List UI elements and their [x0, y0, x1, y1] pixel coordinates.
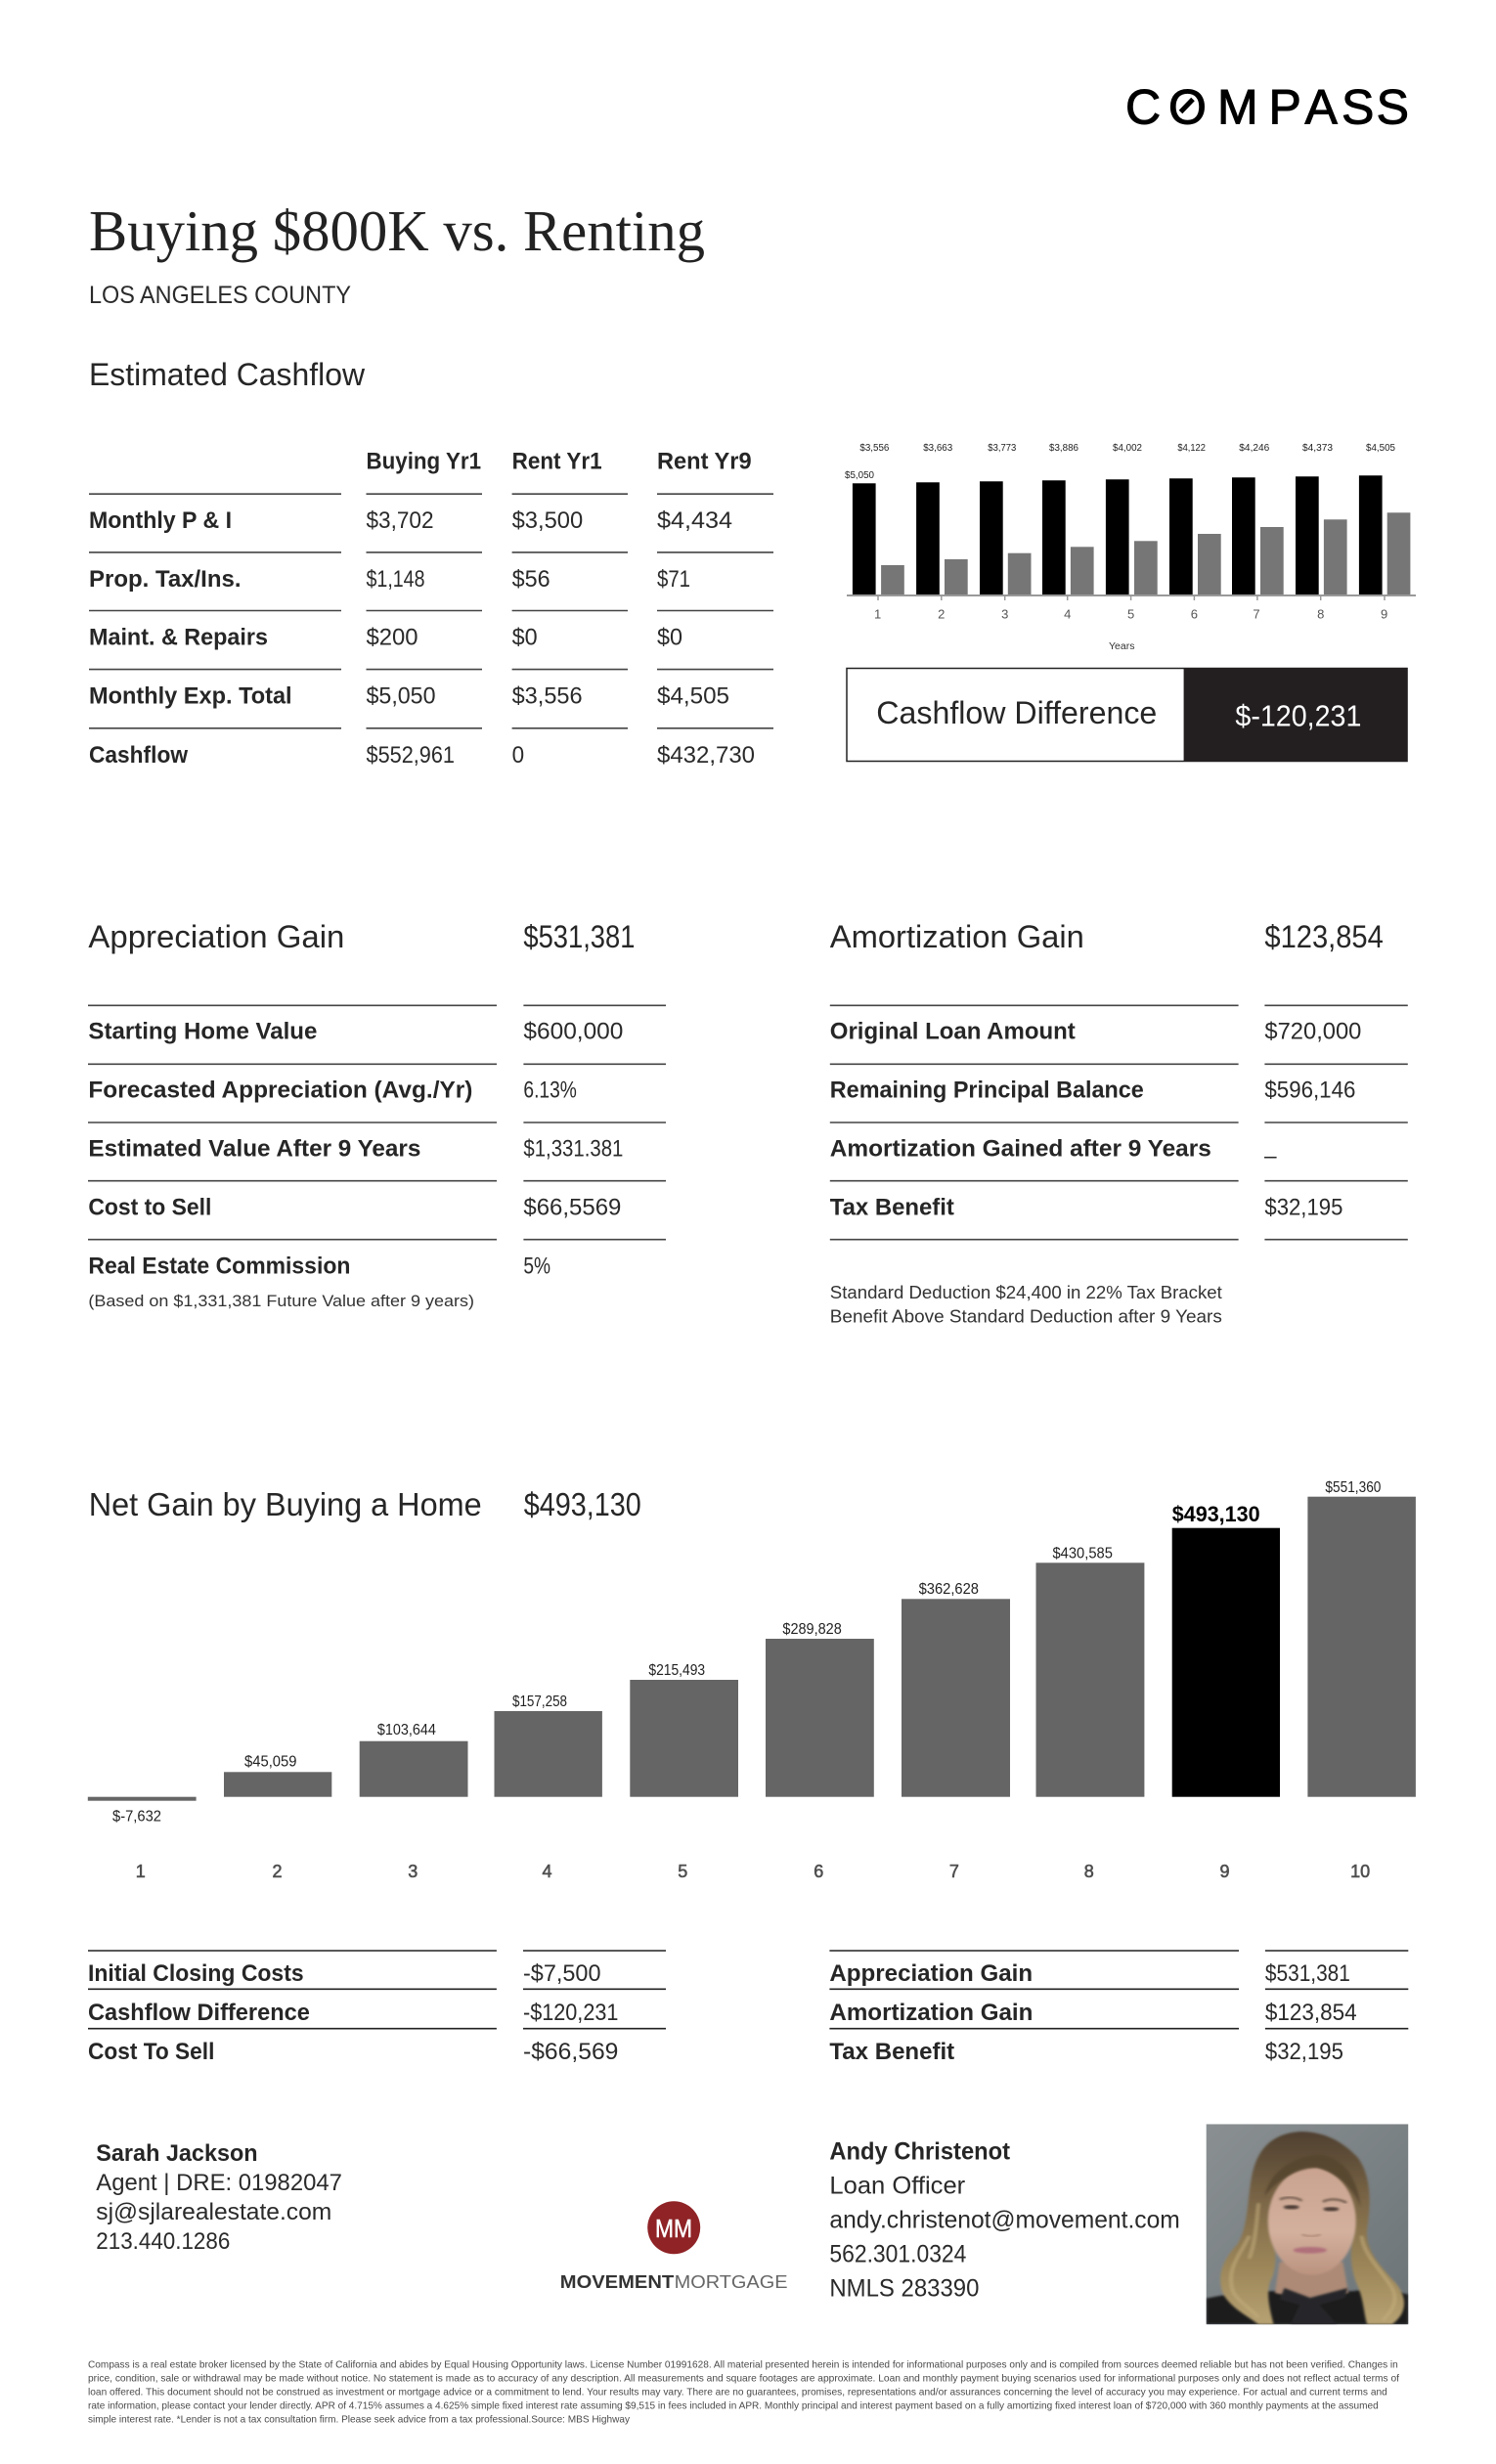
disclaimer: [88, 2359, 1399, 2426]
value labels: $45,059: [244, 1754, 297, 1771]
row: cost to sell: Cost To Sell: [88, 2039, 214, 2065]
row: remaining principal balance: [830, 1077, 1355, 1103]
row: monthly expense total: $3,556: [512, 683, 583, 710]
contact: Andy Christenot: 562.301.0324: [829, 2240, 966, 2267]
row: original loan amount: $720,000: [1264, 1018, 1361, 1044]
row: maintenance and repairs: [89, 624, 682, 651]
row: cashflow difference: -$120,231: [523, 2000, 618, 2026]
value labels: $-7,632: [112, 1809, 161, 1826]
value labels: $3,886: [1049, 443, 1078, 454]
bow: [1280, 2288, 1347, 2324]
axis year labels: 4: [542, 1862, 552, 1881]
table header row: Rent Yr1: [512, 448, 602, 475]
row: forecasted appreciation: Forecasted Appreciation (Avg./Yr): [88, 1077, 472, 1103]
value labels: $430,585: [1052, 1545, 1113, 1562]
bars: [88, 1497, 1416, 1801]
logo: Movement Mortgage: [560, 2201, 788, 2292]
axis year labels: 5: [678, 1862, 687, 1881]
row: cost to sell: [88, 1194, 621, 1220]
row: starting home value: $600,000: [523, 1018, 623, 1044]
bar chart: monthly expense buying vs renting by year: [845, 443, 1416, 652]
axis year labels: 5: [1127, 607, 1134, 622]
heading: amortization gain: Amortization Gain: [830, 919, 1084, 954]
row: cashflow difference: [88, 2000, 618, 2026]
axis year labels: [136, 1862, 1370, 1881]
hair: [1220, 2132, 1404, 2324]
axis year labels: 3: [408, 1862, 418, 1881]
row: appreciation gain: Appreciation Gain: [829, 1960, 1033, 1987]
value labels: $493,130: [1172, 1502, 1260, 1526]
row: tax benefit: [830, 1194, 1342, 1220]
lips: [1294, 2247, 1327, 2254]
contact: Andy Christenot: [829, 2137, 1180, 2302]
row: monthly P and I: $4,434: [657, 507, 732, 534]
value labels: $3,663: [923, 443, 953, 454]
row: property tax and insurance: [89, 566, 690, 593]
value labels: $362,628: [919, 1581, 979, 1598]
right eye: [1323, 2207, 1340, 2211]
row: cost to sell: Cost to Sell: [88, 1194, 211, 1220]
contact: Andy Christenot: NMLS 283390: [829, 2274, 979, 2302]
row: amortization gain: $123,854: [1265, 2000, 1357, 2026]
row: original loan amount: [830, 1018, 1361, 1044]
value labels: $157,258: [512, 1694, 567, 1710]
row: real estate commission: Real Estate Commission: [88, 1253, 350, 1279]
brows: [1280, 2197, 1346, 2203]
logo: Movement Mortgage: MOVEMENT: [560, 2272, 674, 2292]
table header row: Rent Yr9: [657, 448, 752, 475]
row: cashflow: Cashflow: [89, 742, 188, 769]
callout: cashflow difference: Cashflow Difference: [876, 695, 1157, 730]
row: monthly expense total: [89, 683, 729, 710]
panel: amortization gain: [830, 919, 1408, 1327]
axis title: Years: [1109, 641, 1134, 652]
table: costs summary: [88, 1951, 666, 2065]
row: remaining principal balance: Remaining Principal Balance: [830, 1077, 1144, 1103]
row: tax benefit: $32,195: [1264, 1194, 1342, 1220]
row: cashflow: 0: [512, 742, 524, 769]
row: amortization gained: Amortization Gained after 9 Years: [830, 1135, 1211, 1162]
row: real estate commission: 5%: [523, 1253, 550, 1279]
forehead hair shade: [1264, 2154, 1361, 2207]
row: cost to sell: -$66,569: [523, 2039, 618, 2065]
value labels: [112, 1479, 1381, 1826]
heading: net gain by buying a home: $493,130: [524, 1486, 641, 1522]
row: tax benefit: $32,195: [1265, 2039, 1343, 2065]
row: maintenance and repairs: $0: [657, 624, 682, 651]
axis year labels: 7: [949, 1862, 959, 1881]
value labels: $4,246: [1239, 443, 1270, 454]
buying bars (black): [853, 475, 1383, 595]
value labels: $551,360: [1325, 1479, 1381, 1496]
disclaimer: price, condition, sale or withdrawal may be made without notice. No statement is made as to accuracy of any description. All measurements and square footages are approximate. Loan and monthly payment buying scenarios used for informational purposes only and does not reflect actual terms of: [88, 2373, 1399, 2385]
row: estimated value: $1,331.381: [523, 1135, 623, 1162]
disclaimer: rate information, please contact your lender directly. APR of 4.715% assumes a 4.625% simple fixed interest rate assuming $9,515 in fees included in APR. Monthly principal and interest payment based on a fully amortizing fixed interest loan of $720,000 with 360 monthly payments at the assumed: [88, 2400, 1379, 2412]
logo: Movement Mortgage: MM: [655, 2214, 692, 2243]
left eye: [1284, 2205, 1299, 2209]
value labels: $103,644: [377, 1722, 436, 1738]
value labels: $4,122: [1177, 443, 1206, 454]
axis year labels: 3: [1001, 607, 1008, 622]
axis year labels: 8: [1084, 1862, 1094, 1881]
contact: Sarah Jackson: 213.440.1286: [96, 2228, 230, 2255]
note: standard deduction: Standard Deduction $24,400 in 22% Tax Bracket: [830, 1283, 1222, 1302]
heading: amortization gain: $123,854: [1264, 919, 1384, 954]
row: initial closing costs: Initial Closing Costs: [88, 1960, 304, 1987]
row: initial closing costs: [88, 1960, 600, 1987]
row: forecasted appreciation: 6.13%: [523, 1077, 577, 1103]
contact: Sarah Jackson: Agent | DRE: 01982047: [96, 2170, 342, 2196]
row: monthly P and I: Monthly P & I: [89, 507, 232, 534]
contact: Sarah Jackson: sj@sjlarealestate.com: [96, 2199, 331, 2225]
contact: Andy Christenot: andy.christenot@movement.com: [829, 2206, 1180, 2233]
contact: Sarah Jackson: [96, 2140, 342, 2255]
axis year labels: 2: [272, 1862, 283, 1881]
axis year labels: [874, 607, 1387, 622]
axis year labels: 2: [938, 607, 945, 622]
row: cost to sell: $66,5569: [523, 1194, 621, 1220]
renting bars (gray): [881, 512, 1410, 595]
value labels: $5,050: [845, 470, 874, 481]
row: amortization gain: [829, 2000, 1357, 2026]
row: maintenance and repairs: Maint. & Repairs: [89, 624, 268, 651]
row: amortization gained: _: [1264, 1132, 1277, 1160]
axis year labels: 1: [136, 1862, 146, 1881]
value labels: $215,493: [648, 1662, 705, 1679]
row: monthly expense total: $5,050: [366, 683, 436, 710]
axis year labels: 9: [1219, 1862, 1230, 1881]
table header row: [366, 448, 752, 475]
blouse: [1207, 2290, 1408, 2324]
row: tax benefit: Tax Benefit: [830, 1194, 954, 1220]
value labels: $3,773: [988, 443, 1017, 454]
note: future value basis: (Based on $1,331,381 Future Value after 9 years): [88, 1292, 474, 1310]
logo: Compass: COMPASS: [1125, 79, 1409, 134]
row: appreciation gain: $531,381: [1265, 1960, 1350, 1987]
row: estimated value: Estimated Value After 9 Years: [88, 1135, 420, 1162]
heading: appreciation gain: [88, 919, 635, 954]
row: maintenance and repairs: $200: [366, 624, 418, 651]
hair highlights: [1231, 2203, 1394, 2320]
row: cashflow difference: Cashflow Difference: [88, 2000, 310, 2026]
row: estimated value: [88, 1135, 623, 1162]
title: Buying $800K vs. Renting: [89, 198, 705, 263]
callout: cashflow difference: [847, 668, 1408, 762]
axis year labels: 9: [1381, 607, 1387, 622]
row: original loan amount: Original Loan Amount: [830, 1018, 1076, 1044]
axis year labels: 8: [1317, 607, 1324, 622]
row: property tax and insurance: $56: [512, 566, 550, 593]
value labels: $4,373: [1302, 443, 1333, 454]
panel: appreciation gain: [88, 919, 666, 1310]
row: monthly P and I: $3,702: [366, 507, 434, 534]
row: property tax and insurance: Prop. Tax/Ins.: [89, 566, 241, 593]
heading: estimated cashflow: Estimated Cashflow: [89, 357, 366, 392]
axis year labels: 6: [1191, 607, 1198, 622]
value labels: $4,002: [1113, 443, 1142, 454]
axis year labels: 7: [1253, 607, 1260, 622]
heading: appreciation gain: $531,381: [523, 919, 635, 954]
contact: Andy Christenot: Loan Officer: [829, 2172, 965, 2199]
subtitle: LOS ANGELES COUNTY: [89, 282, 351, 309]
callout: cashflow difference: $-120,231: [1235, 698, 1361, 732]
value labels: $4,505: [1366, 443, 1395, 454]
row: monthly expense total: Monthly Exp. Total: [89, 683, 292, 710]
axis year labels: 4: [1064, 607, 1071, 622]
heading: appreciation gain: Appreciation Gain: [88, 919, 344, 954]
logo: Movement Mortgage: MORTGAGE: [675, 2272, 788, 2292]
row: starting home value: Starting Home Value: [88, 1018, 317, 1044]
row: appreciation gain: [829, 1960, 1350, 1987]
axis year labels: 6: [814, 1862, 823, 1881]
row: tax benefit: [829, 2039, 1343, 2065]
face: [1268, 2168, 1356, 2275]
row: cost to sell: [88, 2039, 618, 2065]
row: real estate commission: [88, 1253, 550, 1279]
note: standard deduction: [830, 1283, 1222, 1327]
row: property tax and insurance: $1,148: [366, 566, 424, 593]
row: maintenance and repairs: $0: [512, 624, 538, 651]
row: monthly P and I: $3,500: [512, 507, 583, 534]
row: monthly expense total: $4,505: [657, 683, 729, 710]
row: amortization gain: Amortization Gain: [829, 2000, 1033, 2026]
row: remaining principal balance: $596,146: [1264, 1077, 1355, 1103]
disclaimer: simple interest rate. *Lender is not a tax consultation firm. Please seek advice from a tax professional.Source: MBS Highway: [88, 2414, 631, 2426]
disclaimer: loan offered. This document should not be construed as investment or mortgage advice or a commitment to lend. Your results may vary. There are no guarantees, promises, representations and/or assurances concerning the level of accuracy you may experience. For actual and current terms and: [88, 2387, 1387, 2398]
table header row: Buying Yr1: [366, 448, 481, 475]
table: estimated cashflow: [89, 448, 773, 769]
heading: net gain by buying a home: Net Gain by Buying a Home: [89, 1486, 482, 1522]
bar chart: net gain by year: [88, 1479, 1416, 1881]
note: standard deduction: Benefit Above Standard Deduction after 9 Years: [830, 1307, 1222, 1327]
row: cashflow: $552,961: [366, 742, 455, 769]
value labels: [845, 443, 1395, 481]
contact: Sarah Jackson: Sarah Jackson: [96, 2140, 258, 2167]
portrait photo: [1207, 2124, 1408, 2324]
disclaimer: Compass is a real estate broker licensed by the State of California and abides by Equal Housing Opportunity laws. License Number 01991628. All material presented herein is intended for informational purposes only and is compiled from sources deemed reliable but has not been verified. Changes in: [88, 2359, 1398, 2371]
row: starting home value: [88, 1018, 623, 1044]
neck: [1275, 2262, 1348, 2301]
row: cashflow: [89, 742, 755, 769]
value labels: $3,556: [859, 443, 890, 454]
contact: Andy Christenot: Andy Christenot: [829, 2137, 1011, 2165]
axis year labels: 10: [1350, 1862, 1370, 1881]
value labels: $289,828: [782, 1621, 842, 1638]
heading: amortization gain: [830, 919, 1384, 954]
row: tax benefit: Tax Benefit: [829, 2039, 954, 2065]
row: property tax and insurance: $71: [657, 566, 690, 593]
axis year labels: 1: [874, 607, 881, 622]
row: cashflow: $432,730: [657, 742, 755, 769]
table: gains summary: [829, 1951, 1408, 2065]
row: monthly P and I: [89, 507, 732, 534]
nose: [1301, 2234, 1321, 2236]
row: initial closing costs: -$7,500: [523, 1960, 600, 1987]
